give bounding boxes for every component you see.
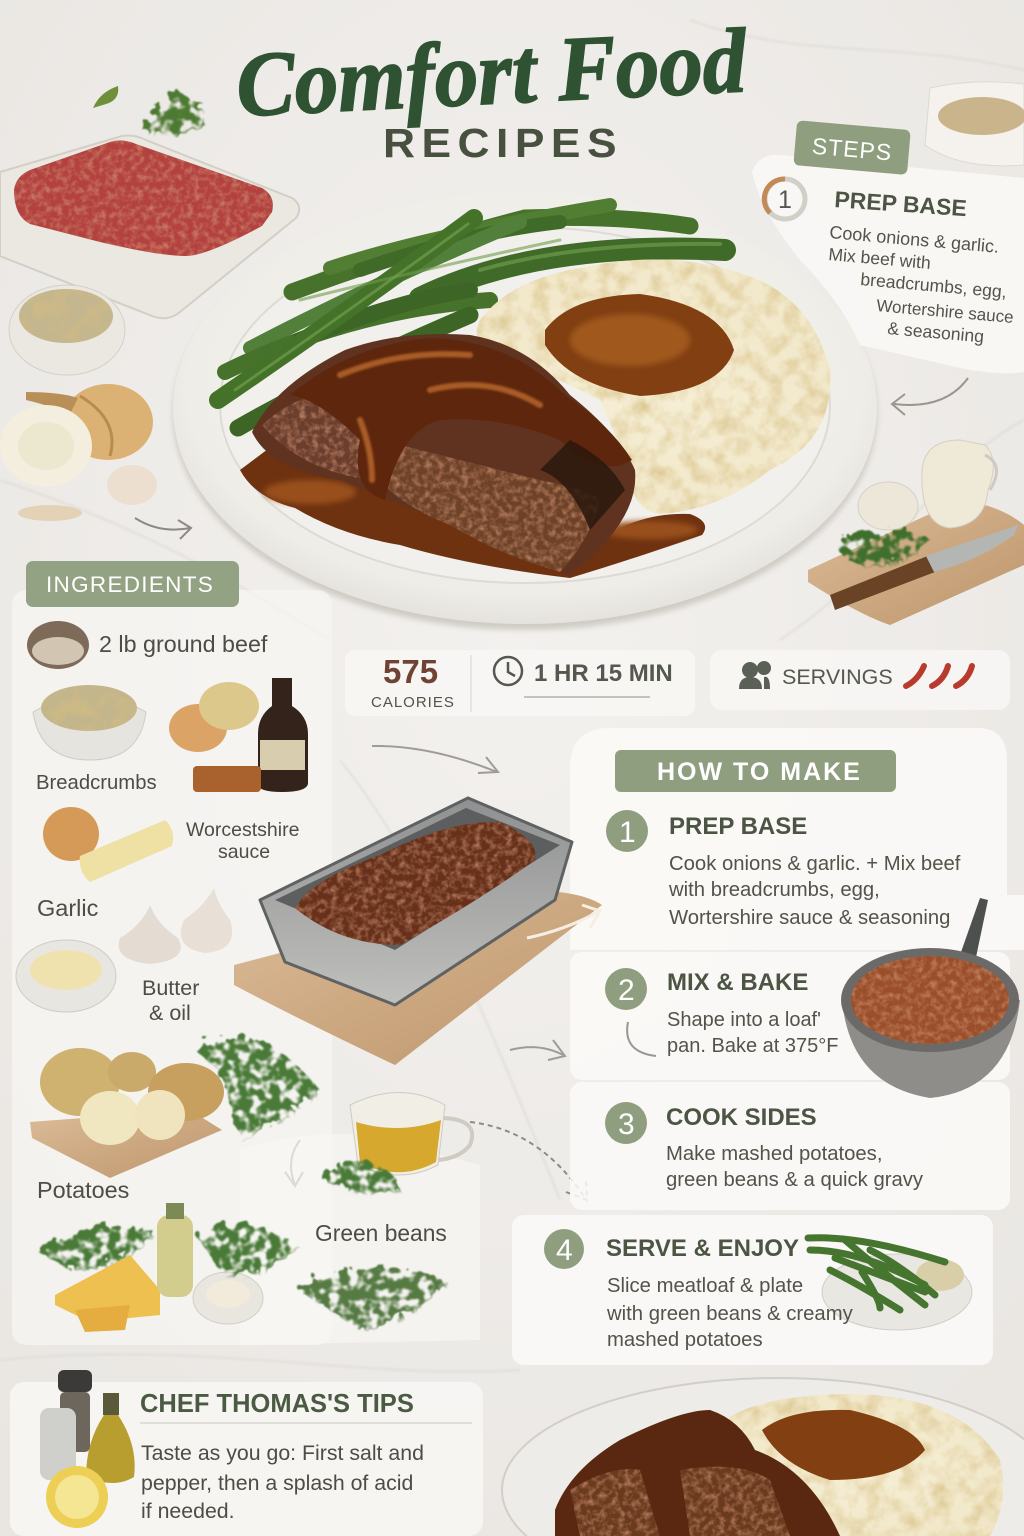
illustration: bowl of green beans xyxy=(808,1238,972,1330)
step 1: Wortershire sauce & seasoning xyxy=(669,907,950,929)
illustration: main plate xyxy=(173,192,877,630)
panel: step four: mashed potatoes xyxy=(607,1329,763,1351)
arrow: pan to step xyxy=(527,905,600,938)
steps tag xyxy=(793,120,911,175)
panel: ingredients xyxy=(12,561,332,1345)
illustration: raw ground beef tray xyxy=(0,136,299,318)
illustration: bowl of oats xyxy=(9,285,125,375)
step 1: 1 xyxy=(619,816,636,849)
panel: step four: SERVE & ENJOY xyxy=(606,1235,799,1262)
panel: step two: pan. Bake at 375°F xyxy=(667,1035,838,1057)
panel: step two: 2 xyxy=(618,974,635,1007)
ingredient: potatoes and herbs xyxy=(30,1039,320,1203)
label: worcestshire sauce: sauce xyxy=(218,841,270,863)
steps tag: STEPS xyxy=(811,133,893,166)
step text: breadcrumbs, egg, xyxy=(860,269,1008,302)
icon: people xyxy=(739,661,771,689)
ingredient: butter and oil: & oil xyxy=(149,1001,191,1025)
panel: how to make step one xyxy=(570,728,1024,950)
step text xyxy=(828,186,1014,346)
illustration: loaf pan on board xyxy=(234,798,602,1065)
icon: chilies xyxy=(906,666,972,686)
panel: chef tips xyxy=(10,1370,483,1536)
title: RECIPES xyxy=(383,120,623,166)
illustration: cutting board with knife, jar and pitcher xyxy=(808,440,1024,625)
arrow: to plate xyxy=(135,518,191,539)
panel: calories and time xyxy=(345,650,695,716)
panel: step three: Make mashed potatoes, xyxy=(666,1143,882,1165)
gravy pool xyxy=(240,440,705,578)
icon: clock xyxy=(494,657,522,685)
meatloaf xyxy=(252,334,635,575)
panel: chef tips: if needed. xyxy=(141,1499,235,1523)
ingredient: ground beef xyxy=(27,621,268,669)
arrow: board to step two xyxy=(510,1040,565,1060)
ingredient: garlic: Garlic xyxy=(37,895,99,921)
how to make heading xyxy=(615,750,896,792)
panel: calories and time: 575 xyxy=(383,653,438,690)
green beans xyxy=(218,205,725,428)
arrow: steps curve xyxy=(892,378,968,415)
ingredient: ground beef: 2 lb ground beef xyxy=(99,631,268,657)
gravy on mash xyxy=(545,294,734,396)
illustration: salt, pepper, oil, lemon xyxy=(40,1370,135,1528)
step icon: 1 xyxy=(778,186,792,214)
label: green beans: Green beans xyxy=(315,1220,447,1246)
ingredient: potatoes and herbs: Potatoes xyxy=(37,1177,129,1203)
ingredient: garlic xyxy=(37,888,232,964)
step 1: Cook onions & garlic. + Mix beef xyxy=(669,853,961,875)
ingredient: egg, potato, bottle xyxy=(169,678,308,792)
ingredient: breadcrumbs xyxy=(33,685,157,794)
step icon xyxy=(764,179,805,219)
step 1 xyxy=(606,810,961,929)
panel: step four: 4 xyxy=(556,1234,573,1267)
illustration: bottom plate xyxy=(502,1378,1024,1536)
panel: step four: Slice meatloaf & plate xyxy=(607,1275,803,1297)
step text: Cook onions & garlic. xyxy=(829,222,1000,257)
panel: calories and time: CALORIES xyxy=(371,694,455,711)
panel: green beans xyxy=(240,1134,480,1345)
panel: step four xyxy=(512,1215,993,1365)
arrow xyxy=(285,1140,303,1186)
label: worcestshire sauce: Worcestshire xyxy=(186,819,299,841)
ingredients heading xyxy=(26,561,239,607)
title: Comfort Food xyxy=(234,9,750,136)
panel: step two: MIX & BAKE xyxy=(667,969,808,996)
panel: step three xyxy=(570,1082,1010,1210)
panel: step three: green beans & a quick gravy xyxy=(666,1169,924,1191)
panel: step four: with green beans & creamy xyxy=(606,1303,854,1325)
ingredient: butter and oil xyxy=(16,940,199,1025)
panel: calories and time: 1 HR 15 MIN xyxy=(534,660,673,687)
step 1: with breadcrumbs, egg, xyxy=(668,879,880,901)
label: worcestshire sauce xyxy=(186,819,299,863)
ingredient: herbs, cheese and oil xyxy=(38,1203,298,1332)
illustration: glass cup of oil xyxy=(323,1092,472,1193)
step text: Wortershire sauce xyxy=(876,296,1014,327)
panel: servings: SERVINGS xyxy=(782,665,893,689)
panel: steps xyxy=(752,120,1024,373)
arrow: curve to how to make xyxy=(372,746,498,773)
panel: servings xyxy=(710,650,1010,710)
icon: parsley leaves xyxy=(93,86,208,138)
panel: step three: COOK SIDES xyxy=(666,1104,817,1131)
ingredient: breadcrumbs: Breadcrumbs xyxy=(36,772,157,794)
ingredient: butter and oil: Butter xyxy=(142,976,199,1000)
panel: chef tips: CHEF THOMAS'S TIPS xyxy=(140,1390,414,1418)
step text: PREP BASE xyxy=(834,186,968,221)
panel: step two xyxy=(570,952,1010,1080)
step 1: PREP BASE xyxy=(669,813,807,840)
how to make heading: HOW TO MAKE xyxy=(657,758,862,786)
ingredients heading: INGREDIENTS xyxy=(46,572,214,597)
step text: Mix beef with xyxy=(828,244,932,273)
panel: step three: 3 xyxy=(618,1108,635,1141)
label: green beans xyxy=(298,1220,448,1330)
arrow: dashed to step three xyxy=(470,1122,587,1200)
mashed potatoes xyxy=(477,259,830,514)
illustration: gravy cup xyxy=(925,82,1024,166)
panel: step two: Shape into a loaf' xyxy=(667,1009,821,1031)
panel: chef tips: Taste as you go: First salt and xyxy=(141,1441,424,1465)
illustration: pot of meat mixture xyxy=(841,898,1020,1098)
ingredient: egg and butter xyxy=(43,807,173,882)
step text: & seasoning xyxy=(887,318,985,346)
panel: chef tips: pepper, then a splash of acid xyxy=(141,1471,413,1495)
illustration: onion and garlic xyxy=(0,384,157,521)
